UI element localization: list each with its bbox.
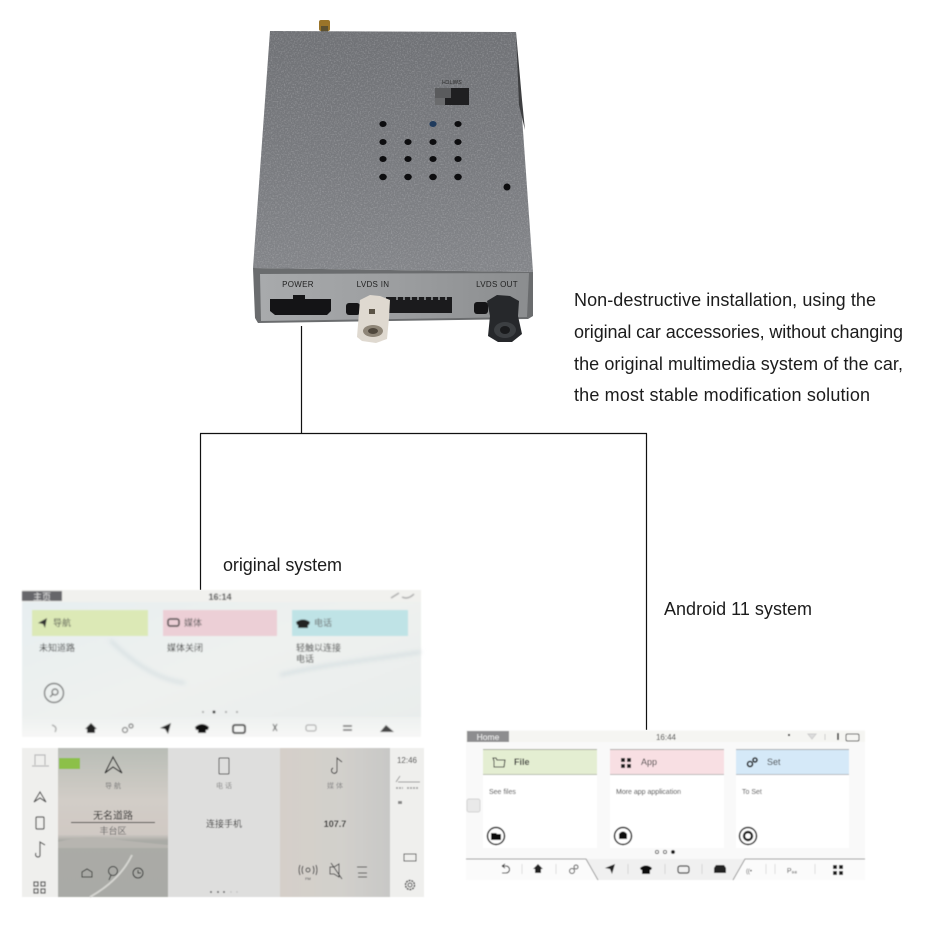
bottom navigation bar [466,859,865,880]
status bar: 16:44 [656,733,677,742]
description text: the original multimedia system of the car, [574,354,903,374]
panel: media: 媒 体 [327,781,343,790]
panel: media [280,748,390,897]
switch window: SWITCH [442,78,462,84]
label: Android 11 system: Android 11 system [664,599,812,619]
status bar [22,591,414,602]
panel: media: 107.7 [324,819,346,829]
bottom navigation bar: ((• [746,869,752,875]
card: media: 媒体 [184,617,202,628]
icon: antenna connector [319,20,330,32]
card: File [483,749,597,848]
page dots [202,710,238,714]
label: original system: original system [223,555,342,575]
card: phone [292,610,408,664]
card: media [163,610,277,653]
card: File: File [514,757,530,767]
switch window [435,78,469,105]
card: phone: 电话 [314,617,332,628]
card: phone: 轻触以连接 [296,642,341,653]
card: File: See files [489,789,516,796]
right sidebar [396,756,420,890]
card: navigation [32,610,148,653]
panel: navigation [58,748,168,897]
card: Set: Set [767,757,781,767]
description text: Non-destructive installation, using the [574,290,876,310]
description text: original car accessories, without changing [574,322,903,342]
card: App: More app application [616,789,681,796]
bottom icons [52,723,394,734]
panel: navigation: 丰台区 [99,825,127,836]
card: phone: 电话 [296,653,314,664]
panel: media: FM [305,876,311,881]
page dots [655,850,675,854]
indicator holes [379,121,510,190]
right sidebar: 12:46 [397,756,418,765]
panel: navigation: 无名道路 [93,809,133,822]
power port: POWER [282,280,314,289]
status bar [466,731,865,742]
side handle [467,799,480,812]
panel: phone [168,748,280,897]
panel: phone: 电 话 [216,781,232,790]
screen: original system cards [22,748,424,897]
screen: original system home [22,590,421,737]
left sidebar [32,755,49,893]
LVDS OUT port: LVDS OUT [476,280,518,289]
card: App [610,749,724,848]
card: Set [736,749,849,848]
connector lines [200,326,647,730]
device top face [253,31,533,272]
power port [270,280,331,315]
description text [574,290,903,405]
device front face [253,268,533,323]
status bar: 主页 [33,591,51,602]
panel: navigation: 导 航 [105,781,121,790]
card: media: 媒体关闭 [167,642,203,653]
card: App: App [641,757,657,767]
LVDS OUT port [474,280,522,342]
card: Set: To Set [742,789,762,796]
LVDS IN port [346,280,452,343]
card: navigation: 未知道路 [39,642,75,653]
status bar: 16:14 [208,592,232,602]
description text: the most stable modification solution [574,385,870,405]
bottom navigation bar: P₉₈ [787,868,797,875]
icon: search [44,684,64,702]
card: navigation: 导航 [53,617,71,628]
status bar: Home [477,732,500,742]
device right side [516,32,525,130]
panel: phone: 连接手机 [206,818,242,829]
device: LVDS interface box [253,20,533,343]
screen: Android 11 system home [466,730,865,880]
LVDS IN port: LVDS IN [357,280,389,289]
